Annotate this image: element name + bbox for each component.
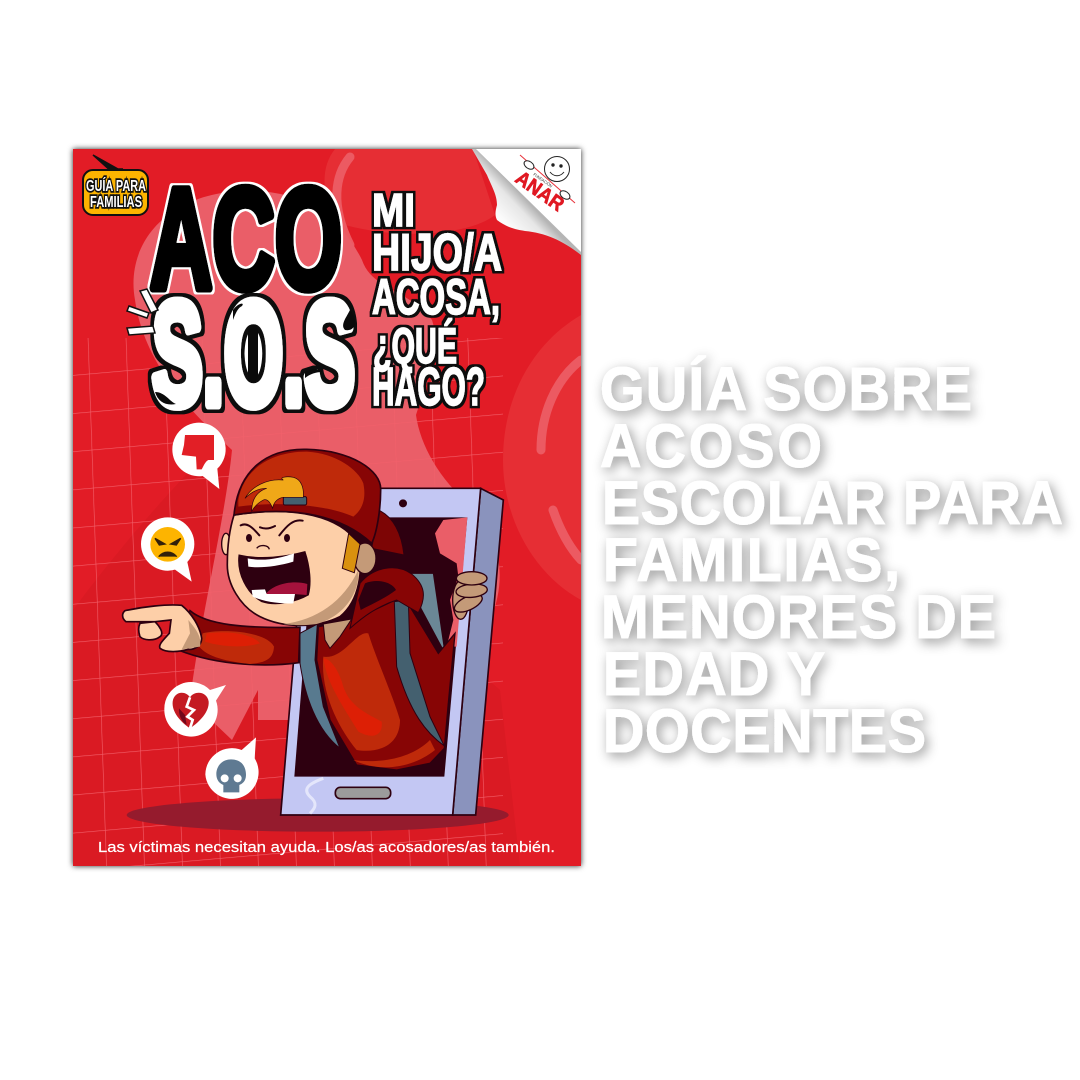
white logo sheet bbox=[476, 149, 581, 252]
broken screen hole bbox=[435, 517, 467, 647]
pointing hand bbox=[123, 605, 202, 652]
cap adjuster bbox=[283, 497, 307, 505]
publisher corner fold bbox=[472, 149, 581, 255]
palm bbox=[453, 581, 469, 619]
left ear bbox=[222, 533, 230, 555]
head bbox=[227, 511, 360, 625]
phone button bbox=[335, 787, 391, 799]
neck bbox=[323, 619, 352, 648]
subtitle line 2: HIJO/A bbox=[372, 224, 502, 282]
heading line 7: DOCENTES bbox=[603, 696, 926, 765]
logo: Fundación ANAR bbox=[511, 155, 575, 216]
heart crack bbox=[187, 697, 194, 728]
heading line 1: GUÍA SOBRE bbox=[600, 354, 972, 423]
poster background bbox=[73, 149, 581, 866]
phone camera bbox=[399, 499, 407, 507]
angry emoji bbox=[150, 527, 185, 562]
middle finger bbox=[455, 583, 488, 599]
pointing arm bbox=[178, 611, 300, 665]
right ear bbox=[354, 543, 376, 574]
subtitle: Mi hijo/a acosa, ¿qué hago? bbox=[372, 184, 502, 417]
hair bbox=[245, 477, 303, 512]
lower finger bbox=[452, 591, 485, 616]
title: S.O.S bbox=[127, 272, 355, 435]
subtitle line 5: HAGO? bbox=[372, 357, 485, 417]
logo smiley bbox=[522, 156, 572, 201]
heading line 6: EDAD Y bbox=[603, 639, 825, 708]
phone screen bbox=[294, 517, 467, 777]
badge text: GUÍA PARA bbox=[86, 176, 146, 195]
mouth bbox=[239, 552, 310, 604]
ground shadow bbox=[127, 798, 509, 832]
torso highlight bbox=[323, 633, 400, 751]
speech bubble: angry face bbox=[141, 517, 194, 582]
backpack strap left bbox=[300, 624, 340, 748]
badge: Guía para familias bbox=[83, 155, 148, 215]
infographic canvas bbox=[68, 144, 1070, 871]
lower teeth bbox=[252, 589, 295, 603]
upper teeth bbox=[248, 553, 294, 567]
letter O slot bbox=[248, 325, 258, 382]
badge box bbox=[83, 170, 148, 215]
backpack bbox=[407, 573, 445, 653]
cap crown bbox=[234, 449, 381, 543]
eyebrows bbox=[241, 520, 303, 535]
background shapes bbox=[73, 149, 581, 866]
heart shade bbox=[179, 708, 187, 725]
footer tagline: Las víctimas necesitan ayuda. Los/as acosadores/as también. bbox=[98, 839, 555, 856]
badge pointer bbox=[93, 155, 123, 172]
phone front bbox=[281, 488, 481, 815]
thumbs-down icon bbox=[182, 435, 214, 469]
bubble shape bbox=[172, 423, 226, 489]
ink marks on letters bbox=[155, 304, 355, 404]
badge text line 2: FAMILIAS bbox=[90, 194, 142, 211]
S.O.S letters: S.O.S bbox=[152, 272, 355, 435]
broken heart icon bbox=[173, 693, 209, 728]
jaw shading bbox=[283, 570, 358, 625]
bubble shape bbox=[164, 682, 226, 737]
cap back flap bbox=[372, 510, 404, 555]
cap highlight bbox=[238, 452, 364, 517]
arm highlight bbox=[199, 631, 274, 664]
heading line 3: ESCOLAR PARA bbox=[602, 468, 1063, 537]
title: ACO: ACO bbox=[150, 160, 342, 319]
speech bubble: thumbs down bbox=[172, 423, 226, 489]
gripping hand bbox=[452, 572, 488, 619]
angry features bbox=[155, 538, 181, 557]
torso bbox=[317, 600, 455, 770]
phone side bbox=[453, 488, 503, 815]
panel: poster cover bbox=[73, 149, 581, 866]
arm bright bbox=[205, 633, 260, 646]
subtitle line 1: MI bbox=[372, 184, 415, 236]
page curl bbox=[472, 149, 581, 255]
upper finger bbox=[456, 572, 487, 585]
heading: guide description bbox=[600, 354, 1063, 765]
skull eyes bbox=[221, 774, 242, 782]
logo wordmark: ANAR bbox=[511, 167, 568, 216]
phone crack bbox=[307, 778, 323, 813]
hood inner bbox=[358, 581, 396, 610]
curled fingers bbox=[139, 622, 162, 640]
backpack strap right bbox=[394, 600, 444, 746]
hood bbox=[350, 568, 423, 628]
hand shade bbox=[182, 620, 200, 649]
bubble shape bbox=[141, 517, 194, 582]
torso hem bbox=[353, 740, 435, 767]
logo small text: FUNDACIÓN bbox=[532, 172, 553, 188]
speech bubble: broken heart bbox=[164, 682, 226, 737]
subtitle line 4: ¿QUÉ bbox=[373, 318, 457, 374]
orange strap bbox=[342, 533, 360, 573]
illustration: shouting boy leaving phone bbox=[123, 423, 509, 832]
skull icon bbox=[216, 759, 246, 792]
eyes bbox=[246, 534, 252, 542]
logo line bbox=[520, 155, 575, 203]
speech bubble: skull bbox=[205, 737, 259, 799]
letter O fill bbox=[234, 316, 270, 388]
nose bbox=[257, 546, 269, 549]
heading line 2: ACOSO bbox=[600, 411, 822, 480]
tongue bbox=[265, 582, 307, 595]
impact marks bbox=[127, 289, 158, 335]
heading line 5: MENORES DE bbox=[601, 582, 996, 651]
bubble shape bbox=[205, 737, 259, 799]
subtitle line 3: ACOSA, bbox=[372, 269, 500, 325]
torso bright bbox=[323, 658, 382, 736]
heading line 4: FAMILIAS, bbox=[603, 525, 900, 594]
